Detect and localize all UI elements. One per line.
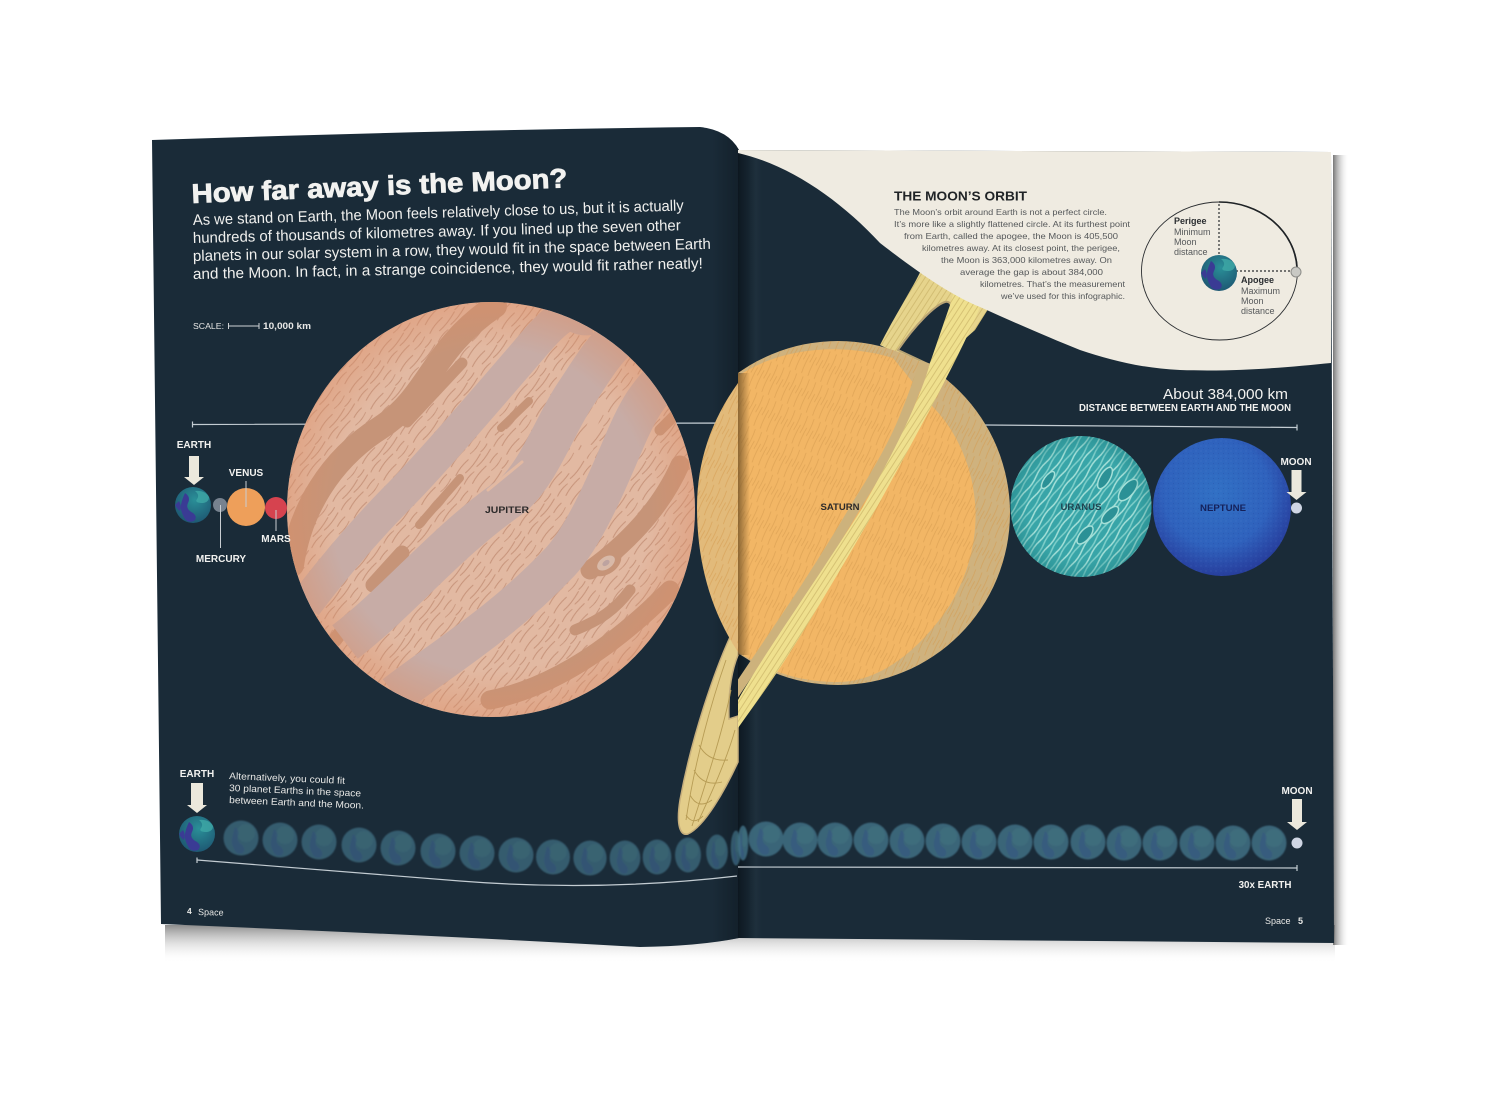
ring: lower back piece [678,637,738,834]
label: Earth: EARTH [177,440,211,451]
Moon marker [1280,457,1312,514]
arrow: Earth [184,456,204,485]
text: orbit explanation: kilometres away. At its closest point, the perigee, [922,243,1120,253]
text: 30 Earths note: Alternatively, you could fit [229,771,346,787]
ring: upper back loop [880,262,1000,370]
small planets group [175,440,291,565]
gutter shading [720,132,748,941]
text: 30 Earths note: 30 planet Earths in the space [229,783,361,800]
label: Apogee: Apogee [1241,275,1274,285]
intro text: planets in our solar system in a row, they would fit in the space between Earth [193,236,711,265]
icon: Earth [1201,255,1237,291]
planet: Uranus [1010,436,1152,577]
text: orbit explanation: average the gap is about 384,000 [960,267,1103,277]
ring: front strip [738,270,1000,728]
text: orbit explanation: kilometres. That’s the measurement [980,279,1126,289]
label: Saturn: SATURN [820,502,860,513]
bottom Earth marker [179,769,215,852]
label: Apogee: distance [1241,306,1275,316]
distance heading [1079,386,1291,414]
page number right [1265,916,1303,926]
text: orbit explanation: from Earth, called the apogee, the Moon is 405,500 [904,231,1118,241]
diagram: Moon orbit [1142,202,1301,340]
bottom Earth marker: EARTH [180,769,214,780]
label: Venus: VENUS [229,468,264,479]
page number left: 4 [187,906,192,916]
label: Perigee [1174,216,1211,257]
intro text: As we stand on Earth, the Moon feels relatively close to us, but it is actually [193,197,684,229]
text: orbit explanation: It’s more like a slightly flattened circle. At its furthest point [894,219,1131,229]
label: Perigee: Moon [1174,237,1197,247]
page number left: Space [198,907,224,918]
label: Perigee: Minimum [1174,227,1211,237]
planet: Neptune [1153,438,1291,576]
label: Apogee [1241,275,1280,316]
text: orbit explanation: the Moon is 363,000 kilometres away. On [941,255,1112,265]
bottom Moon marker [1281,786,1313,848]
label: Neptune: NEPTUNE [1200,503,1246,514]
panel: orbit cream area [738,150,1331,370]
intro text: and the Moon. In fact, in a strange coincidence, they would fit rather neatly! [193,255,703,283]
row of 30 Earths [224,820,1286,876]
label: Perigee: Perigee [1174,216,1207,226]
planet: Saturn with rings [666,262,1010,834]
Moon marker: MOON [1280,457,1312,468]
title: How far away is the Moon? [191,163,568,209]
label: Mars: MARS [261,534,291,545]
label: Jupiter: JUPITER [485,505,529,516]
planet: Mars [265,497,287,519]
text: 30 Earths note [229,771,364,812]
bottom Moon marker: MOON [1281,786,1313,797]
scale bar: 10,000 km [263,321,311,331]
page shadows [165,155,1349,963]
icon: Moon [1291,267,1301,277]
planet: Earth [175,487,211,523]
label: Mercury: MERCURY [196,554,246,565]
label: Uranus: URANUS [1060,502,1102,513]
planet: Jupiter [280,295,710,725]
heading: The Moon's Orbit: THE MOON’S ORBIT [894,190,1027,204]
distance line: Earth to Moon [192,422,1297,430]
planet: Mercury [213,498,227,512]
page number left [187,906,224,918]
distance line: 30x Earth [197,858,1297,885]
text: orbit explanation: we’ve used for this infographic. [1000,291,1125,301]
intro text: hundreds of thousands of kilometres away. If you lined up the seven other [193,217,681,247]
scale bar: SCALE: [193,321,224,331]
globe: right of gutter [738,341,1010,698]
scale bar [193,321,311,331]
label: Apogee: Moon [1241,296,1264,306]
intro text [193,197,711,283]
distance heading: DISTANCE BETWEEN EARTH AND THE MOON [1079,403,1291,414]
label: 30x Earth: 30x EARTH [1239,880,1291,891]
text: orbit explanation [894,207,1131,301]
text: 30 Earths note: between Earth and the Moon. [229,795,364,812]
panel: left page [152,127,739,947]
text: orbit explanation: The Moon’s orbit around Earth is not a perfect circle. [894,207,1107,217]
planet: Venus [227,488,265,526]
page number right: 5 [1298,916,1303,926]
label: Perigee: distance [1174,247,1208,257]
page number right: Space [1265,916,1291,926]
panel: right page [738,150,1334,943]
globe: left of gutter [697,383,738,652]
label: Apogee: Maximum [1241,286,1280,296]
distance heading: About 384,000 km [1163,386,1288,403]
